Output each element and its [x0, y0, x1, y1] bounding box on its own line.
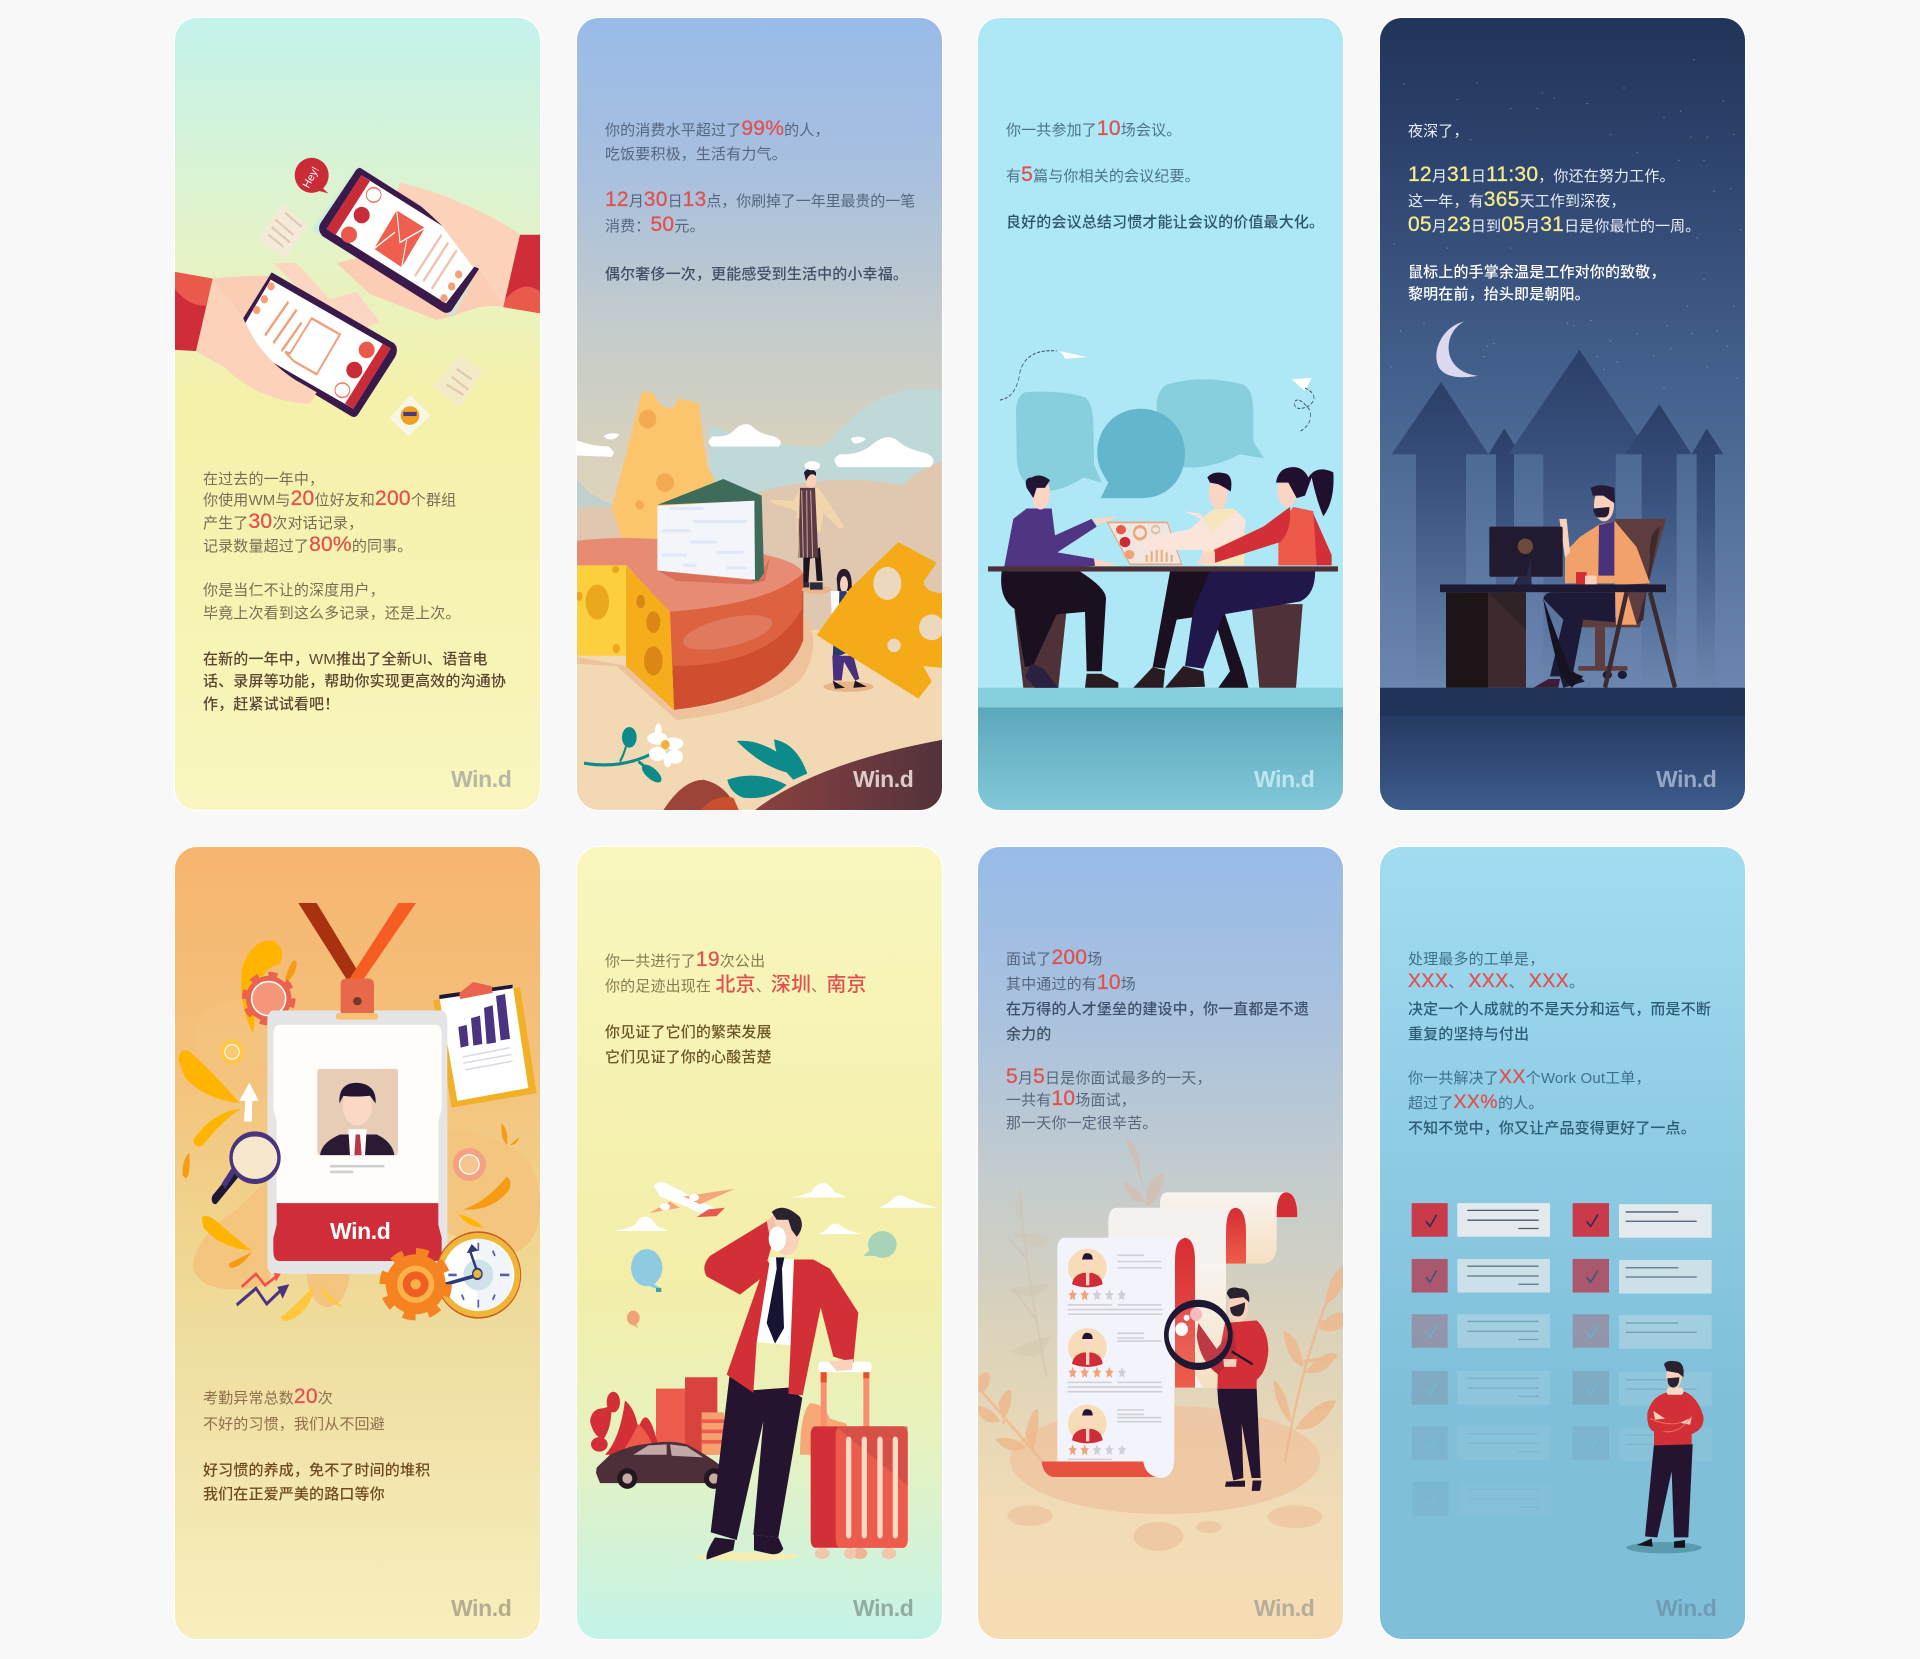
- person: standing man arms crossed: [1626, 1361, 1704, 1553]
- panel: spending summary: [577, 18, 942, 810]
- illustration: two hands holding phones: [175, 158, 540, 436]
- text block: interview statistics: [1006, 946, 1309, 1132]
- panel: work order summary: [1380, 847, 1745, 1639]
- icon: Hey speech bubble: Hey!: [301, 165, 322, 190]
- text block: message statistics: 产生了30次对话记录，: [203, 510, 363, 533]
- person: man with magnifier: [1166, 1288, 1268, 1491]
- text block: spending statistics: 消费：50元。: [605, 213, 705, 236]
- logo: Win.d: [451, 766, 511, 792]
- panel: business travel summary: [577, 847, 942, 1639]
- icon: Hey speech bubble: [295, 158, 329, 193]
- checklist row 4: [1412, 1371, 1712, 1406]
- desk and monitor: [1440, 527, 1666, 688]
- clouds: [613, 1183, 938, 1234]
- text block: meeting statistics: [1006, 117, 1324, 231]
- text block: interview statistics: 一共有10场面试，: [1006, 1087, 1136, 1110]
- foreground hills: [657, 738, 950, 820]
- checklist row 3: [1412, 1314, 1712, 1349]
- text block: interview statistics: 其中通过的有10场: [1006, 971, 1136, 994]
- large cheese slice: [817, 542, 950, 699]
- illustration: ID badge: [178, 903, 540, 1322]
- icon: airplane: [649, 1182, 735, 1217]
- person: child carrying cheese: [823, 569, 873, 692]
- icon: clipboard chart: [433, 982, 537, 1108]
- text block: attendance statistics: 好习惯的养成，免不了时间的堆积: [203, 1462, 430, 1479]
- person: chef: [770, 461, 844, 594]
- text block: work order statistics: 处理最多的工单是，: [1408, 951, 1544, 968]
- text block: travel statistics: 它们见证了你的心酸苦楚: [605, 1049, 772, 1066]
- icon: hot air balloons: [627, 1249, 662, 1328]
- text block: travel statistics: 你见证了它们的繁荣发展: [605, 1024, 772, 1041]
- lanyard: [298, 903, 416, 982]
- icon: up arrow: [239, 1083, 259, 1122]
- text: card logo: Win.d: [330, 1218, 390, 1244]
- text block: interview statistics: 在万得的人才堡垒的建设中，你一直都是不遗: [1006, 1001, 1309, 1018]
- ID card: [267, 978, 447, 1274]
- text block: attendance statistics: [203, 1385, 430, 1503]
- checklist row 1: [1412, 1203, 1712, 1238]
- person: right woman: [1165, 467, 1334, 688]
- panel: recruiting summary: [978, 847, 1343, 1639]
- text block: late night statistics: 这一年，有365天工作到深夜，: [1408, 188, 1626, 211]
- icon: upper hand and phone: [312, 165, 540, 320]
- panel: messaging summary: [175, 18, 540, 810]
- background hills: [570, 390, 950, 820]
- logo: Win.d: [1254, 766, 1314, 792]
- text block: interview statistics: 面试了200场: [1006, 946, 1102, 969]
- person: left man: [1001, 475, 1118, 688]
- panel: attendance summary: [175, 847, 540, 1639]
- text block: message statistics: 话、录屏等功能，帮助你实现更高效的沟通协: [203, 673, 506, 690]
- illustration: resumes and man with magnifier: [978, 1137, 1343, 1551]
- icon: yellow gear: [220, 1039, 244, 1064]
- text block: meeting statistics: 良好的会议总结习惯才能让会议的价值最大化。: [1006, 214, 1324, 231]
- text block: spending statistics: 12月30日13点，你刷掉了一年里最贵的一笔: [605, 188, 915, 211]
- text block: late night statistics: [1408, 123, 1700, 303]
- ground: [1370, 688, 1750, 820]
- illustration: meeting at a table: [978, 350, 1343, 810]
- text block: interview statistics: 那一天你一定很辛苦。: [1006, 1115, 1158, 1132]
- text block: spending statistics: 吃饭要积极，生活有力气。: [605, 146, 787, 163]
- text block: late night statistics: 12月31日11:30，你还在努力工作。: [1408, 163, 1675, 186]
- panel: meeting summary: [978, 18, 1343, 810]
- text block: work order statistics: 重复的坚持与付出: [1408, 1026, 1529, 1043]
- text block: interview statistics: 余力的: [1006, 1026, 1051, 1043]
- text block: attendance statistics: 我们在正爱严美的路口等你: [203, 1486, 385, 1503]
- icon: peach gear: [453, 1148, 486, 1181]
- logo: Win.d: [451, 1595, 511, 1621]
- logo: Win.d: [853, 1595, 913, 1621]
- person: bearded man: [1533, 485, 1675, 688]
- text block: message statistics: 你使用WM与20位好友和200个群组: [203, 487, 456, 510]
- text block: attendance statistics: 不好的习惯，我们从不回避: [203, 1416, 385, 1433]
- text block: message statistics: [203, 471, 506, 713]
- text block: message statistics: 在新的一年中，WM推出了全新UI、语音电: [203, 651, 488, 668]
- city buildings and plants: [590, 1377, 847, 1455]
- text block: message statistics: 作，赶紧试试看吧！: [203, 696, 339, 713]
- front scroll column: [1175, 1238, 1226, 1388]
- illustration: checklist and standing man: [1412, 1203, 1712, 1554]
- checklist row 2: [1412, 1259, 1712, 1294]
- back resume: [1160, 1192, 1297, 1264]
- icon: trend arrows: [237, 1273, 289, 1305]
- text block: work order statistics: XXX、 XXX、 XXX。: [1408, 970, 1584, 992]
- clouds: [570, 424, 933, 467]
- icon: car: [596, 1442, 724, 1489]
- panel: late night work summary: [1380, 18, 1745, 810]
- text block: work order statistics: [1408, 951, 1711, 1137]
- text block: message statistics: 在过去的一年中，: [203, 471, 324, 488]
- orange splashes: [178, 941, 519, 1321]
- icon: orange gear: [384, 1252, 448, 1316]
- blue cheese wedge: [657, 479, 770, 584]
- middle resume: [1108, 1208, 1263, 1388]
- text block: work order statistics: 超过了XX%的人。: [1408, 1091, 1543, 1113]
- text block: late night statistics: 黎明在前，抬头即是朝阳。: [1408, 286, 1590, 303]
- person: middle man: [1133, 472, 1248, 688]
- ground bands: [970, 688, 1350, 820]
- icon: speech bubble: [863, 1231, 897, 1258]
- logo: Win.d: [853, 766, 913, 792]
- candidate rows: [1068, 1249, 1162, 1459]
- logo: Win.d: [1656, 766, 1716, 792]
- text block: spending statistics: [605, 117, 915, 283]
- text block: work order statistics: 决定一个人成就的不是天分和运气，而是不断: [1408, 1001, 1711, 1018]
- chair: [1577, 519, 1666, 679]
- text block: work order statistics: 不知不觉中，你又让产品变得更好了一点。: [1408, 1120, 1696, 1137]
- icon: red gear: [245, 975, 292, 1022]
- text block: late night statistics: 夜深了，: [1408, 123, 1469, 140]
- text block: late night statistics: 05月23日到05月31日是你最忙的一周。: [1408, 213, 1700, 236]
- table: [988, 566, 1338, 572]
- text block: message statistics: 你是当仁不让的深度用户，: [203, 582, 385, 599]
- text block: spending statistics: 你的消费水平超过了99%的人，: [605, 117, 830, 140]
- text block: travel statistics: 你一共进行了19次公出: [605, 948, 765, 971]
- plants: [584, 723, 807, 798]
- illustration: traveller with suitcase: [590, 1182, 938, 1561]
- paper planes: [1000, 351, 1314, 431]
- person: man in red jacket: [695, 1208, 858, 1561]
- background leaves and ground: [978, 1137, 1343, 1551]
- icon: lower hand and phone: [175, 263, 397, 417]
- text block: interview statistics: 5月5日是你面试最多的一天，: [1006, 1065, 1212, 1088]
- cheese wheel: [567, 538, 813, 720]
- text block: meeting statistics: 有5篇与你相关的会议纪要。: [1006, 163, 1200, 186]
- text block: message statistics: 记录数量超过了80%的同事。: [203, 533, 412, 556]
- icon: clock: [436, 1232, 521, 1318]
- back cheese: [612, 392, 715, 542]
- text block: travel statistics: 你的足迹出现在 北京、深圳、南京: [605, 974, 867, 996]
- text block: attendance statistics: 考勤异常总数20次: [203, 1385, 333, 1408]
- text block: message statistics: 毕竟上次看到这么多记录，还是上次。: [203, 605, 461, 622]
- text block: travel statistics: [605, 948, 867, 1066]
- checklist row 5: [1412, 1426, 1712, 1461]
- speech bubbles: [1016, 379, 1264, 498]
- text block: spending statistics: 偶尔奢侈一次，更能感受到生活中的小幸福。: [605, 266, 908, 283]
- icon: crescent moon: [1436, 321, 1478, 377]
- upward arrows: [1392, 350, 1723, 688]
- logo: Win.d: [1656, 1595, 1716, 1621]
- icon: magnifier: [215, 1134, 279, 1199]
- illustration: cheese world: [577, 390, 942, 810]
- front resume: [1042, 1238, 1185, 1478]
- illustration: man working at night: [1380, 59, 1745, 810]
- icon: suitcase: [811, 1362, 908, 1559]
- yellow cheese wedge: [567, 565, 674, 710]
- text block: late night statistics: 鼠标上的手掌余温是工作对你的致敬，: [1408, 264, 1666, 281]
- stars: [1390, 59, 1741, 388]
- laptop chart: [1107, 522, 1182, 564]
- logo: Win.d: [1254, 1595, 1314, 1621]
- background blobs: [193, 1000, 540, 1308]
- checklist row 6: [1413, 1482, 1551, 1516]
- text block: meeting statistics: 你一共参加了10场会议。: [1006, 117, 1181, 140]
- text block: work order statistics: 你一共解决了XX个Work Out工单，: [1408, 1066, 1651, 1088]
- icon: paper notes: [258, 204, 482, 436]
